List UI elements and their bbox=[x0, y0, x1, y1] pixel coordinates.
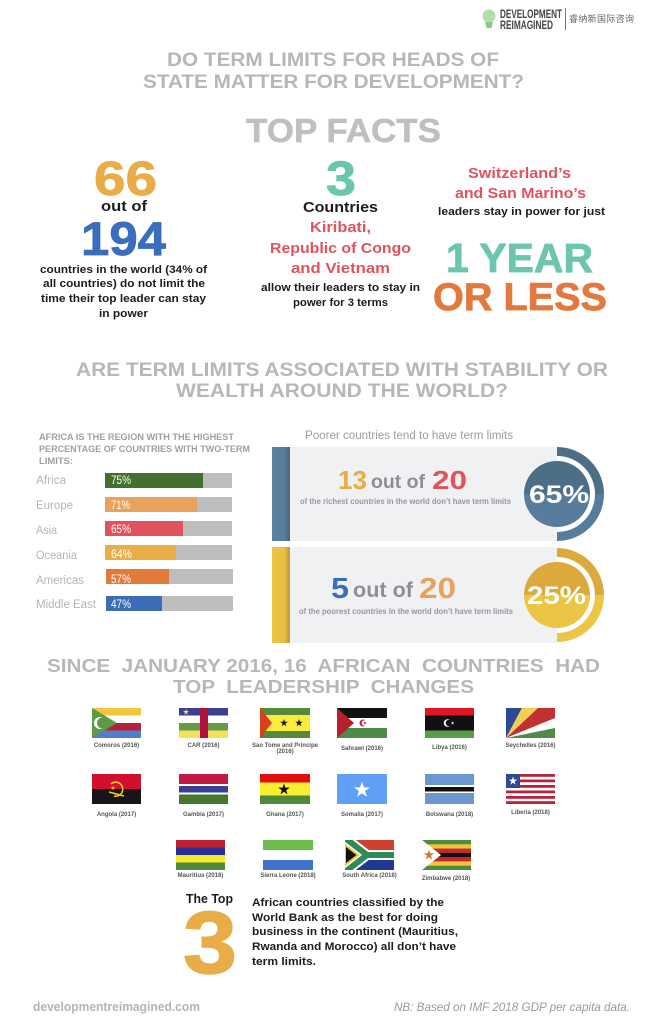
fact: 3 countries: Republic of Congo bbox=[270, 240, 411, 257]
callout: the top 3 bbox=[183, 892, 458, 992]
flag: South Africa bbox=[342, 838, 397, 879]
fact: 66 out of 194: in power bbox=[99, 308, 149, 320]
bar: Asia 65%: Asia bbox=[36, 525, 58, 537]
bar: Asia 65% bbox=[36, 521, 232, 537]
fact: 3 countries: Kiribati, bbox=[310, 219, 371, 236]
flag: Mauritius bbox=[176, 840, 225, 879]
panel: poorest countries bbox=[272, 547, 604, 643]
flag: South Africa: South Africa (2018) bbox=[342, 873, 397, 879]
bar: Americas 57% bbox=[36, 569, 233, 587]
callout: the top 3: World Bank as the best for doing bbox=[252, 912, 438, 924]
flag: Comoros: Comoros (2016) bbox=[94, 743, 139, 749]
heading: stability or wealth: WEALTH AROUND THE WORLD? bbox=[176, 381, 508, 402]
bar: Europe 71%: Europe bbox=[36, 500, 73, 512]
fact: 3 countries: Countries bbox=[303, 200, 378, 216]
callout: the top 3: Rwanda and Morocco) all don’t have bbox=[252, 941, 456, 953]
panel: poorest countries: 25% bbox=[527, 582, 586, 610]
logo: Development Reimagined bbox=[482, 8, 634, 32]
flag: Sahrawi: Sahrawi (2016) bbox=[341, 746, 383, 752]
fact: one year or less: OR LESS bbox=[433, 276, 607, 319]
title bbox=[143, 50, 524, 93]
callout: the top 3: The Top bbox=[186, 892, 233, 906]
flag: Ghana: Ghana (2017) bbox=[266, 812, 304, 818]
flag: Somalia: Somalia (2017) bbox=[341, 812, 383, 818]
bar chart: two-term limits by region bbox=[36, 432, 250, 611]
panel: poorest countries: 5 bbox=[331, 573, 349, 605]
flag: Gambia: Gambia (2017) bbox=[183, 812, 224, 818]
logo: Development Reimagined: REIMAGINED bbox=[500, 20, 553, 32]
fact: 3 countries bbox=[261, 153, 420, 309]
chart heading: LIMITS: bbox=[39, 456, 73, 467]
fact: one year or less: leaders stay in power for just bbox=[438, 206, 605, 218]
flag: Liberia bbox=[506, 774, 555, 816]
panel: richest countries bbox=[272, 447, 604, 541]
bar: Africa 75%: 75% bbox=[111, 475, 131, 487]
flag: Angola: Angola (2017) bbox=[97, 812, 136, 818]
logo: Development Reimagined: 睿纳新国际咨询 bbox=[569, 13, 634, 24]
panel: richest countries: 20 bbox=[432, 465, 467, 495]
title: DO TERM LIMITS FOR HEADS OF bbox=[167, 50, 499, 71]
footer: data note: NB: Based on IMF 2018 GDP per capita data. bbox=[394, 1000, 630, 1014]
fact: 66 out of 194: time their top leader can stay bbox=[41, 293, 207, 305]
flag: Botswana bbox=[425, 774, 474, 818]
bar: Europe 71% bbox=[36, 497, 232, 512]
flag: Sao Tome and Principe: Sao Tome and Principe bbox=[252, 743, 319, 749]
flag: Sahrawi bbox=[337, 708, 387, 752]
flag: Mauritius: Mauritius (2018) bbox=[178, 873, 223, 879]
panel: richest countries: out of bbox=[371, 472, 426, 493]
fact: 66 out of 194 bbox=[40, 153, 207, 320]
bar: Oceania 64% bbox=[36, 545, 232, 562]
panel: richest countries: 65% bbox=[529, 481, 589, 509]
fact: 66 out of 194: out of bbox=[101, 199, 147, 215]
bar: Americas 57%: Americas bbox=[36, 575, 84, 587]
flag: Sao Tome and Principe: (2016) bbox=[276, 749, 294, 755]
flag: Sierra Leone bbox=[260, 840, 316, 879]
heading: leadership changes: SINCE JANUARY 2016, 16 AFRICAN COUNTRIES HAD bbox=[47, 656, 600, 676]
logo: Development Reimagined: DEVELOPMENT bbox=[500, 9, 562, 21]
heading: leadership changes: TOP LEADERSHIP CHANGES bbox=[173, 677, 474, 697]
flag: Libya bbox=[425, 708, 474, 751]
heading: leadership changes bbox=[47, 656, 600, 697]
heading: top facts: TOP FACTS bbox=[246, 112, 441, 149]
fact: 66 out of 194: all countries) do not limit the bbox=[43, 278, 205, 290]
chart heading: AFRICA IS THE REGION WITH THE HIGHEST bbox=[39, 432, 234, 443]
flag: Gambia bbox=[179, 774, 228, 818]
flag: Comoros bbox=[92, 708, 141, 749]
fact: 66 out of 194: 66 bbox=[94, 153, 157, 206]
panel: richest countries: of the richest countries in the world don’t have term limits bbox=[300, 497, 512, 506]
subheading: poorer countries: Poorer countries tend to have term limits bbox=[305, 430, 513, 442]
heading: stability or wealth: ARE TERM LIMITS ASSOCIATED WITH STABILITY OR bbox=[76, 360, 608, 381]
chart heading: PERCENTAGE OF COUNTRIES WITH TWO-TERM bbox=[39, 444, 250, 455]
bar: Africa 75% bbox=[36, 473, 232, 488]
bar: Africa 75%: Africa bbox=[36, 475, 67, 487]
flag: Seychelles: Seychelles (2016) bbox=[505, 743, 556, 749]
flag: CAR: CAR (2016) bbox=[187, 743, 220, 749]
fact: 66 out of 194: countries in the world (34% of bbox=[40, 264, 207, 276]
footer: website: developmentreimagined.com bbox=[33, 999, 200, 1014]
flag: Ghana bbox=[260, 774, 310, 818]
flag: Zimbabwe bbox=[422, 840, 471, 882]
flag: Botswana: Botswana (2018) bbox=[426, 812, 473, 818]
fact: 3 countries: 3 bbox=[326, 153, 356, 206]
callout: the top 3: term limits. bbox=[252, 956, 316, 968]
flag: Somalia bbox=[337, 774, 387, 818]
fact: one year or less: and San Marino’s bbox=[455, 185, 586, 202]
bar: Europe 71%: 71% bbox=[111, 500, 130, 512]
bar: Americas 57%: 57% bbox=[111, 574, 131, 586]
flag: Angola bbox=[92, 774, 141, 818]
fact: one year or less bbox=[433, 165, 607, 319]
title: STATE MATTER FOR DEVELOPMENT? bbox=[143, 72, 524, 93]
panel: poorest countries: 20 bbox=[419, 573, 456, 605]
panel: poorest countries: out of bbox=[353, 579, 414, 602]
flag: CAR bbox=[179, 708, 228, 749]
bar: Middle East 47% bbox=[36, 596, 233, 611]
heading: stability or wealth bbox=[76, 360, 608, 402]
flag: Libya: Libya (2016) bbox=[432, 745, 467, 751]
flag: Sierra Leone: Sierra Leone (2018) bbox=[260, 873, 316, 879]
flag: Sao Tome and Principe bbox=[252, 708, 319, 755]
bar: Middle East 47%: 47% bbox=[111, 599, 131, 611]
fact: 3 countries: and Vietnam bbox=[291, 260, 390, 277]
fact: 3 countries: power for 3 terms bbox=[293, 297, 388, 309]
flag: Liberia: Liberia (2018) bbox=[511, 810, 550, 816]
fact: 66 out of 194: 194 bbox=[81, 212, 166, 265]
fact: one year or less: Switzerland’s bbox=[468, 165, 571, 182]
bar: Oceania 64%: Oceania bbox=[36, 550, 78, 562]
bar: Oceania 64%: 64% bbox=[111, 549, 132, 561]
fact: 3 countries: allow their leaders to stay in bbox=[261, 282, 420, 294]
chart heading bbox=[39, 432, 250, 467]
fact: one year or less: 1 YEAR bbox=[446, 235, 593, 281]
callout: the top 3: African countries classified by the bbox=[252, 897, 444, 909]
flag: Seychelles bbox=[505, 708, 556, 749]
bar: Asia 65%: 65% bbox=[111, 524, 131, 536]
panel: poorest countries: of the poorest countries in the world don’t have term limits bbox=[299, 607, 514, 616]
callout: the top 3: business in the continent (Mauritius, bbox=[252, 926, 458, 938]
callout: the top 3: 3 bbox=[183, 893, 237, 992]
flag: Zimbabwe: Zimbabwe (2018) bbox=[422, 876, 470, 882]
bar: Middle East 47%: Middle East bbox=[36, 599, 97, 611]
panel: richest countries: 13 bbox=[338, 465, 367, 495]
